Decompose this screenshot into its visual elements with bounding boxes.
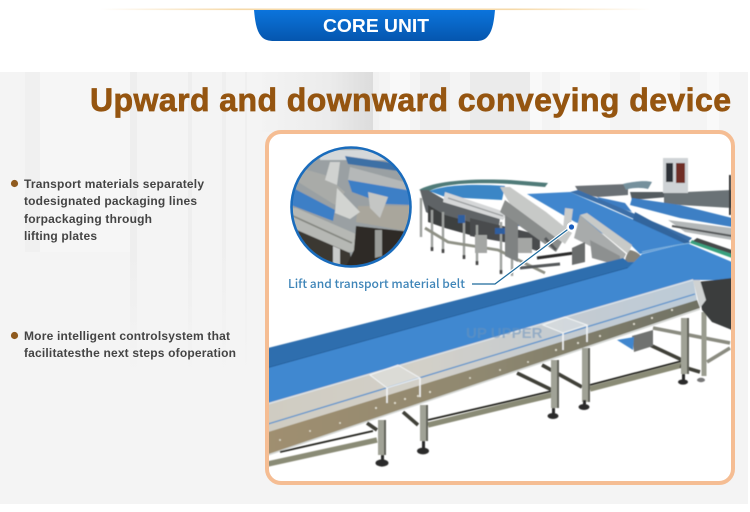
bullet dot one	[11, 180, 18, 187]
side plate	[268, 300, 700, 455]
callout: lift and transport material belt	[288, 222, 576, 292]
steel frame and legs	[268, 312, 730, 464]
upper belt	[527, 192, 687, 254]
transparent guards	[370, 317, 587, 403]
plate rivets	[279, 309, 673, 441]
callout: lift and transport material belt: Lift and transport material belt	[288, 275, 465, 292]
heading tab: core unit	[254, 10, 495, 41]
main belt surface	[268, 243, 732, 403]
bullet list: feature one: Transport materials separately	[24, 177, 204, 191]
inset circle ring	[292, 148, 410, 266]
main heading: Upward and downward conveying device	[90, 82, 731, 118]
bullet list: feature one: todesignated packaging lines	[24, 194, 197, 208]
end frame	[697, 278, 732, 330]
bullet list: feature one	[11, 177, 204, 243]
bullet list: feature two: More intelligent controlsystem that	[24, 329, 230, 343]
bullet list: feature two	[11, 329, 236, 360]
circular conveyor	[419, 179, 548, 276]
bullet list: feature two: facilitatesthe next steps ofoperation	[24, 346, 236, 360]
bullet list: feature one: forpackaging through	[24, 212, 152, 226]
photo panel	[267, 132, 733, 483]
heading tab: core unit: CORE UNIT	[323, 16, 429, 36]
main belt back wall	[268, 258, 640, 368]
inset circle photo	[288, 146, 412, 268]
right hand conveyors	[575, 158, 732, 258]
watermark: UP UPPER	[466, 325, 543, 342]
lifting plates	[500, 187, 642, 268]
bullet list: feature one: lifting plates	[24, 229, 97, 243]
bullet dot two	[11, 332, 18, 339]
transparent side rail	[268, 279, 697, 432]
underside drive unit	[632, 330, 653, 352]
top decorative line	[100, 8, 650, 10]
